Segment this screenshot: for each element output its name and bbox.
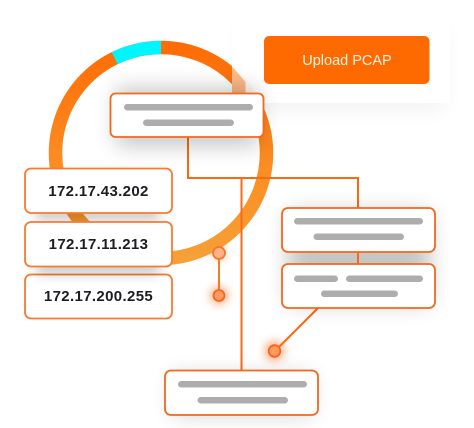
main card [110, 88, 264, 146]
ip card 1: 172.17.43.202 [48, 183, 149, 200]
ip card 2: 172.17.11.213 [49, 236, 148, 253]
node: upper [210, 244, 228, 262]
upload button [264, 36, 430, 84]
ring cyan segment [115, 48, 161, 58]
connector lines [188, 137, 358, 370]
ip card 1 [25, 168, 172, 220]
upload panel [232, 17, 450, 110]
bottom card [165, 370, 318, 416]
node: lower glowing [209, 286, 229, 306]
right card lower [282, 252, 435, 308]
ip card 3 [25, 274, 172, 318]
node: diagonal glowing [264, 340, 286, 362]
ip card 2 [25, 222, 172, 274]
ip card 3: 172.17.200.255 [44, 288, 153, 305]
upload button: Upload PCAP [302, 53, 392, 69]
donut ring [56, 48, 266, 258]
right card upper [282, 208, 435, 304]
